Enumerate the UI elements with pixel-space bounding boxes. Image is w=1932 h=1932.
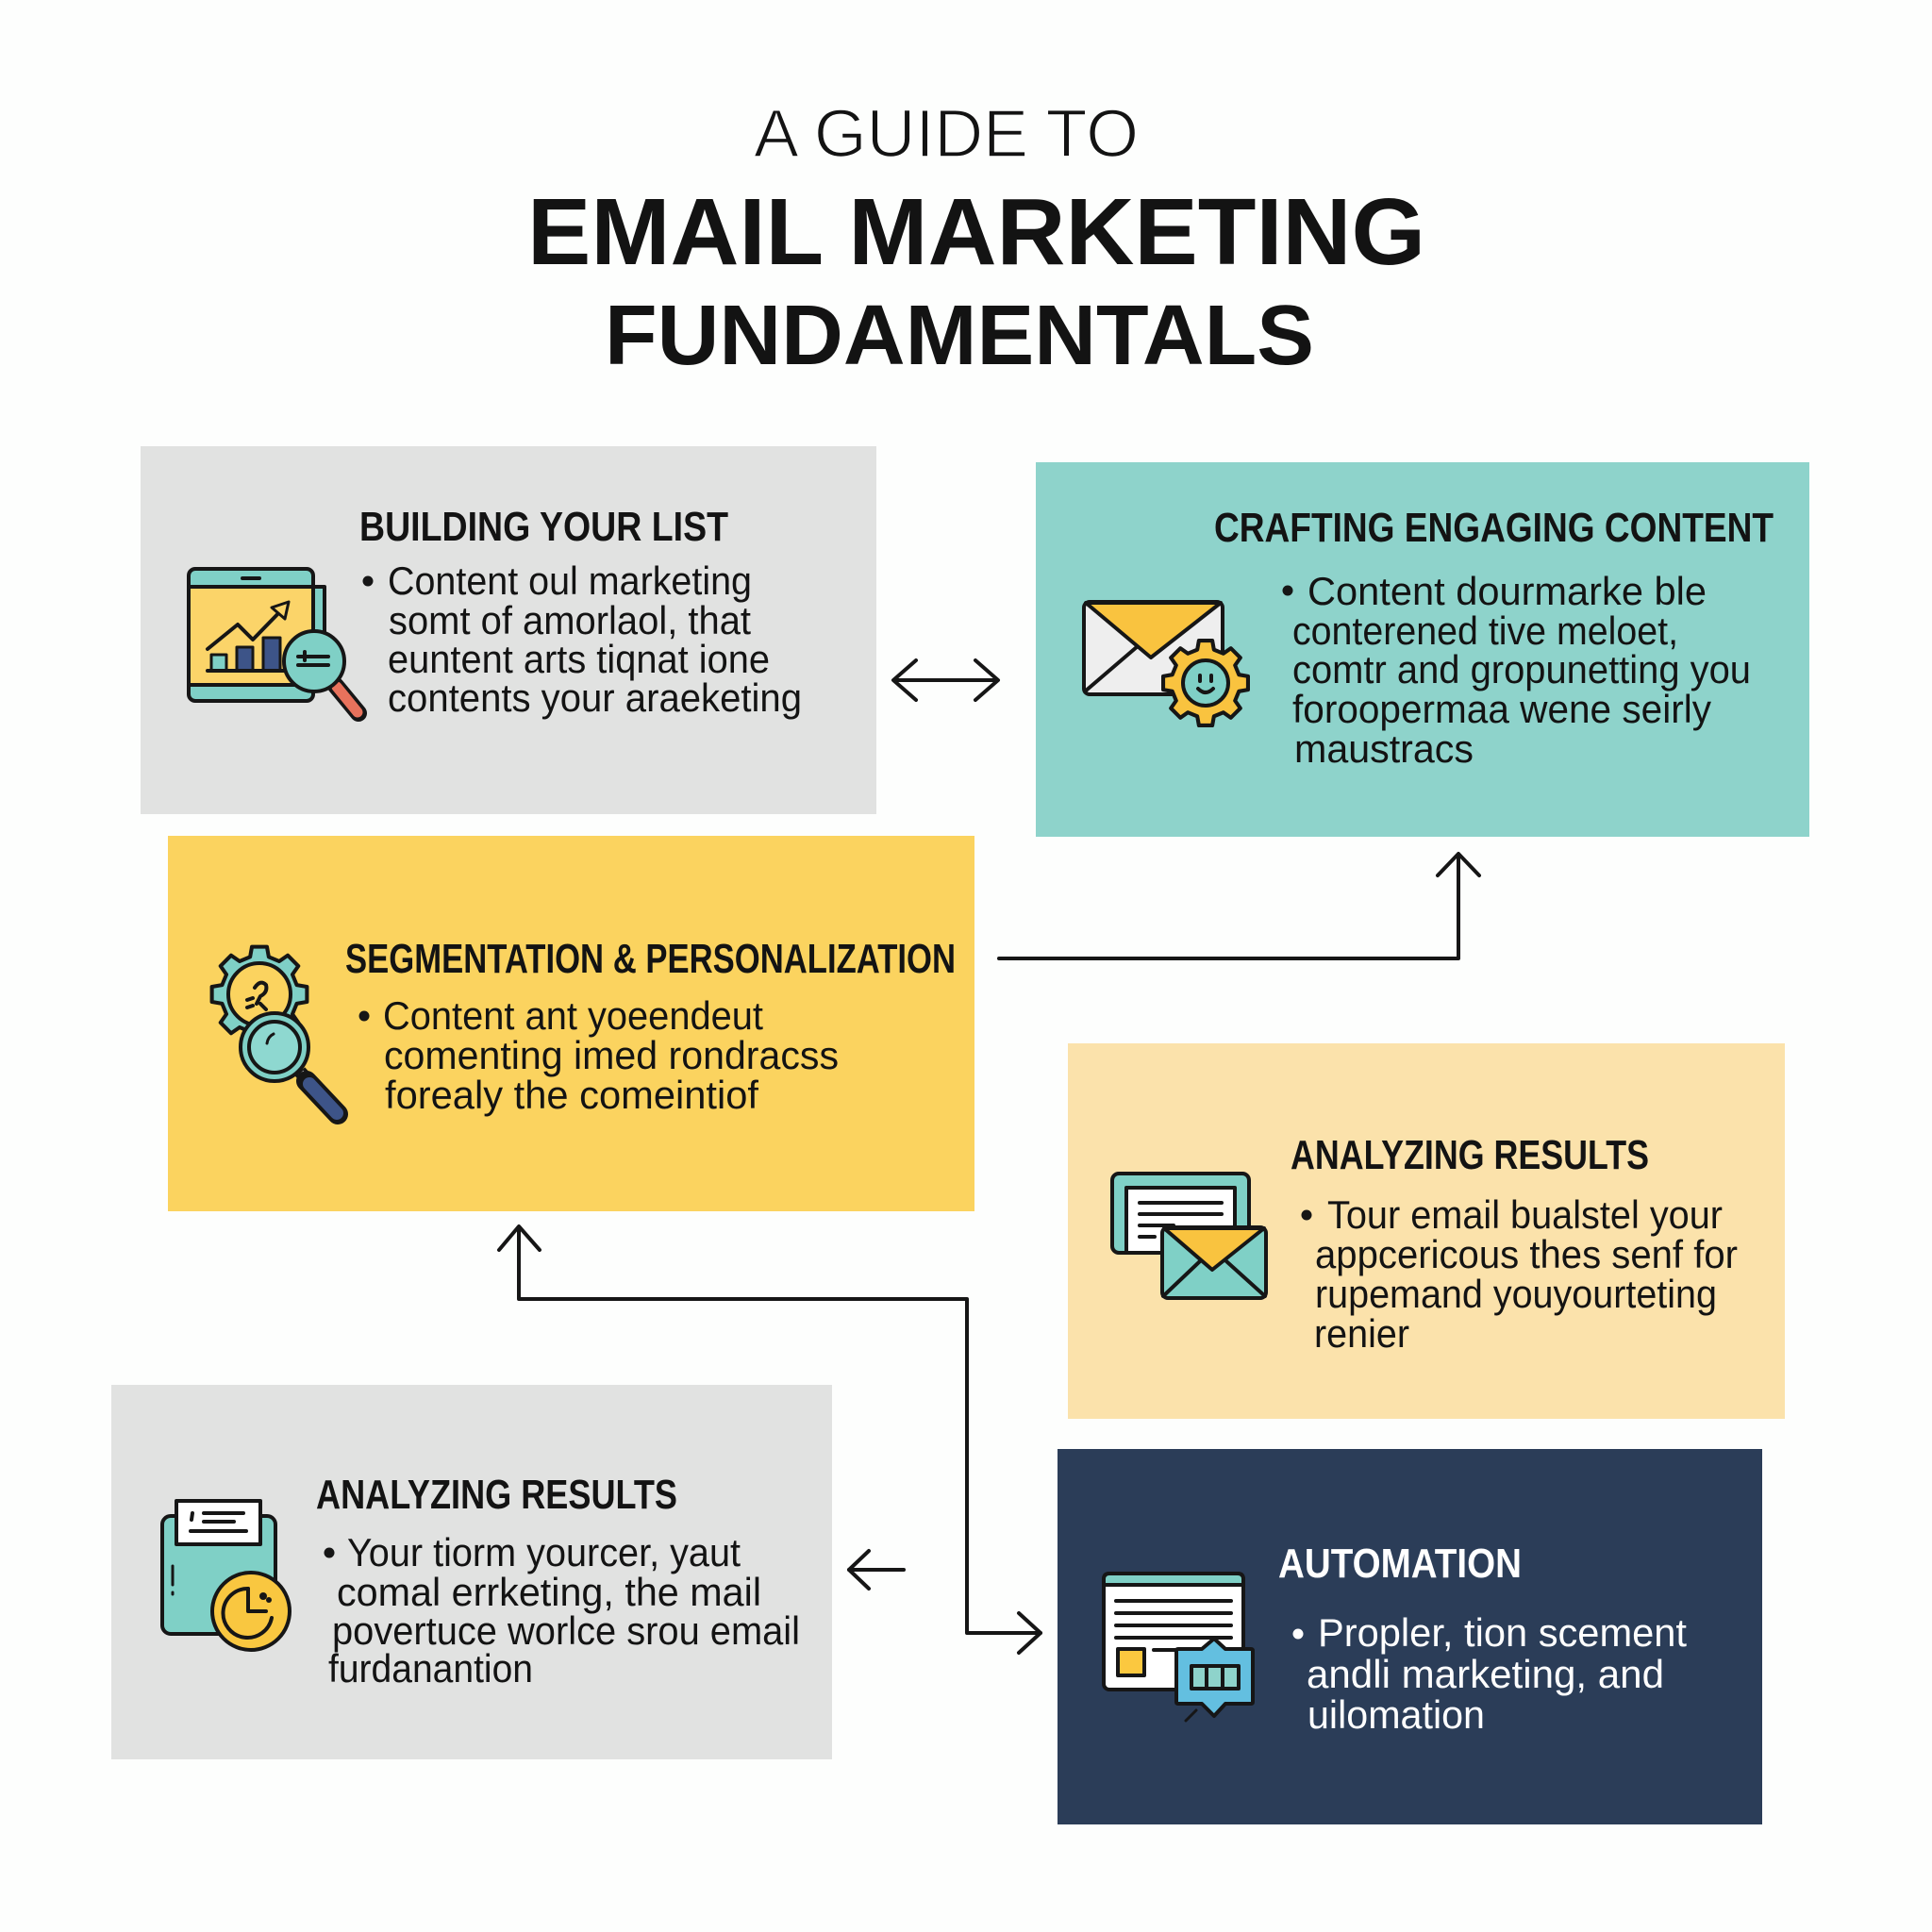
arrow: left pointing to analyzing results: [849, 1551, 904, 1589]
heading: SEGMENTATION & PERSONALIZATION: [345, 936, 956, 982]
body text: comenting imed rondracss: [384, 1033, 839, 1077]
body text: [362, 558, 802, 720]
body text: Content oul marketing: [388, 558, 752, 603]
panel: automation: [1058, 1449, 1762, 1824]
body text: appcericous thes senf for: [1315, 1232, 1738, 1276]
body text: comtr and gropunetting you: [1292, 647, 1751, 691]
body text: maustracs: [1294, 726, 1474, 771]
icon: document and envelope: [1112, 1174, 1266, 1298]
heading: AUTOMATION: [1278, 1541, 1522, 1587]
title: [527, 97, 1425, 383]
body text: uilomation: [1307, 1692, 1485, 1737]
icon: gear with magnifier: [212, 947, 338, 1114]
heading: CRAFTING ENGAGING CONTENT: [1214, 505, 1774, 551]
title: main line 1: EMAIL MARKETING: [527, 179, 1425, 285]
body text: contents your araeketing: [388, 675, 802, 720]
body text: comal errketing, the mail: [337, 1570, 761, 1614]
body text: Content dourmarke ble: [1307, 569, 1707, 613]
arrow: double-headed between list and content: [893, 660, 998, 700]
body text: euntent arts tiqnat ione: [388, 637, 770, 681]
arrow: automation up to segmentation: [499, 1226, 1041, 1653]
icon: clipboard and clock chart: [162, 1501, 290, 1650]
panel: segmentation and personalization: [168, 836, 974, 1211]
panel: building your list: [141, 446, 876, 814]
body text: furdanantion: [328, 1646, 533, 1690]
body text: [1283, 569, 1751, 771]
heading: ANALYZING RESULTS: [1291, 1132, 1649, 1178]
arrow: segmentation up to content: [999, 854, 1479, 958]
icon: envelope with gear: [1084, 602, 1248, 725]
body text: [1292, 1610, 1687, 1737]
icon: tablet with chart and magnifier: [189, 569, 358, 713]
body text: Tour email bualstel your: [1327, 1192, 1723, 1237]
body text: [358, 993, 839, 1117]
body text: somt of amorlaol, that: [389, 598, 751, 642]
body text: conterened tive meloet,: [1292, 608, 1678, 653]
title: main line 2: FUNDAMENTALS: [605, 289, 1314, 383]
body text: [325, 1530, 800, 1690]
body text: foroopermaa wene seirly: [1292, 687, 1711, 731]
panel: analyzing results (right): [1068, 1043, 1785, 1419]
heading: ANALYZING RESULTS: [316, 1472, 677, 1518]
body text: Content ant yoeendeut: [383, 993, 763, 1038]
body text: Your tiorm yourcer, yaut: [347, 1530, 741, 1574]
body text: rupemand youyourteting: [1315, 1272, 1717, 1316]
heading: BUILDING YOUR LIST: [359, 504, 728, 550]
panel: analyzing results (left): [111, 1385, 832, 1759]
icon: browser window with chat bubble: [1104, 1574, 1253, 1721]
panel: crafting engaging content: [1036, 462, 1809, 837]
body text: renier: [1314, 1311, 1409, 1356]
body text: forealy the comeintiof: [385, 1073, 758, 1117]
body text: andli marketing, and: [1307, 1652, 1664, 1696]
body text: [1302, 1192, 1738, 1356]
title: kicker: A GUIDE TO: [754, 97, 1139, 172]
body text: povertuce worlce srou email: [332, 1608, 800, 1653]
body text: Propler, tion scement: [1318, 1610, 1687, 1655]
